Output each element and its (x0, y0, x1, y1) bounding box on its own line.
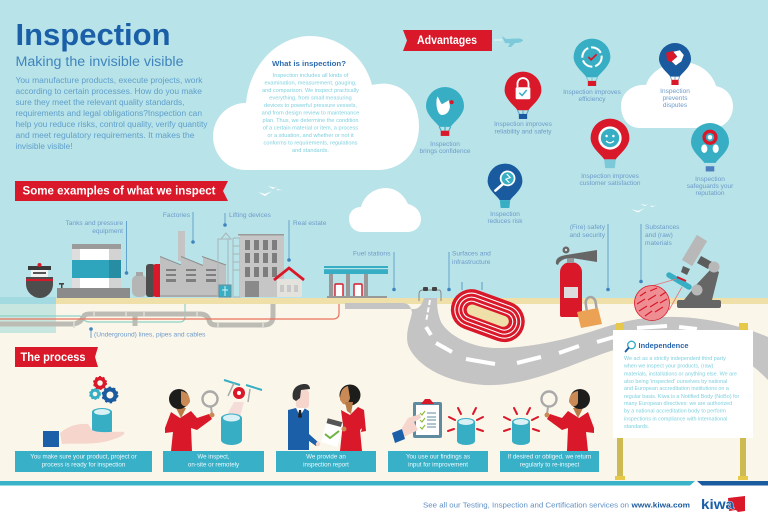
cloud text: Inspection includes all kinds of (273, 73, 349, 79)
step 5 illustration (504, 389, 594, 451)
intro text: invisible visible! (16, 141, 72, 151)
pipes and lines (0, 304, 339, 328)
balloon: reliability: Inspection improves (494, 121, 553, 128)
independence text (623, 356, 740, 430)
independence text: when we inspect your products, (raw) (623, 364, 713, 370)
caption: step 3: inspection report (303, 462, 349, 468)
footer band (0, 481, 768, 486)
label: surfaces: infrastructure (452, 259, 491, 266)
label: fire safety: (Fire) safety (570, 224, 606, 231)
balloon: disputes: prevents (663, 95, 688, 102)
cloud text: examination, measurement, gauging, (264, 80, 357, 86)
subtitle: Making the invisible visible (16, 54, 184, 69)
label: factories: Factories (163, 212, 191, 219)
hand (402, 414, 421, 437)
label: tanks (65, 220, 128, 275)
road markings (426, 300, 697, 364)
kiwa logo (701, 496, 745, 512)
label: underground (89, 327, 206, 338)
microscope (634, 238, 721, 320)
woman in red (340, 384, 366, 451)
caption: step 2 (163, 451, 264, 472)
man in suit (288, 384, 320, 450)
clipboard (413, 399, 442, 438)
footer text: www.kiwa.com (630, 500, 690, 510)
label: lifting devices: Lifting devices (229, 212, 271, 219)
report paper (321, 418, 344, 447)
tank (57, 244, 130, 298)
cloud text: or a situation, and whether or not it (267, 133, 354, 139)
independence text: many European directives: we are authorized (624, 401, 732, 407)
running track (445, 283, 531, 348)
intro text: according to certain processes. How do you make (16, 86, 202, 96)
step 3 illustration (288, 384, 366, 451)
gas bottles (132, 264, 163, 297)
cloud text: and comparison. We inspect practically (262, 88, 359, 94)
woman with magnifier (542, 389, 594, 451)
caption: step 4: input for improvement (408, 462, 468, 468)
balloon: efficiency: efficiency (579, 96, 606, 103)
cuff (392, 429, 405, 443)
white footer background (0, 485, 768, 524)
water (0, 297, 56, 333)
kiwa logo: kiwa (701, 496, 734, 512)
cloud text: conforms to requirements, regulations (264, 140, 358, 146)
label: tanks: Tanks and pressure (65, 220, 123, 227)
label: substances: Substances (645, 224, 680, 231)
balloon: risk: reduces risk (487, 218, 523, 225)
container (221, 414, 242, 445)
gears (90, 377, 118, 402)
cloud text: everything, from small measuring (269, 96, 352, 102)
fuel station (324, 266, 388, 298)
cloud: behind disputes balloon (621, 62, 733, 128)
caption: step 4: You use our findings as (406, 454, 470, 460)
cloud text (262, 73, 359, 154)
lifting device (218, 233, 240, 297)
cloud: middle (349, 188, 421, 232)
red rays (448, 408, 483, 431)
caption: step 1 (15, 451, 152, 472)
label: underground: (Underground) lines, pipes and cables (94, 332, 206, 338)
cloud text: and from design review to maintenance (262, 110, 359, 116)
label: fuel stations: Fuel stations (353, 250, 391, 258)
fire extinguisher (556, 246, 597, 317)
woman with magnifier (165, 389, 218, 451)
padlock (577, 296, 602, 328)
ribbon: advantages (403, 30, 492, 51)
cloud text: plan. Thus, we determine the condition (263, 118, 358, 124)
caption: step 1: process is ready for inspection (42, 462, 126, 468)
label: fire safety: and security (569, 232, 606, 239)
cloud heading: What is inspection? (272, 61, 346, 68)
independence text: inspections in compliance with international (624, 416, 727, 422)
sign post caps (615, 323, 748, 480)
independence text: regular basis. Kiwa is a Notified Body (NoBo) for (624, 394, 740, 400)
balloon: efficiency (563, 39, 622, 103)
balloon: confidence: Inspection (430, 141, 460, 148)
ribbon: some examples (15, 181, 228, 201)
sign posts (617, 438, 746, 478)
balloon: efficiency: Inspection improves (563, 89, 622, 96)
ribbon: some examples: Some examples of what we inspect (22, 186, 216, 198)
independence heading: Independence (638, 341, 688, 350)
fence at road start (419, 287, 441, 301)
balloon: disputes (659, 43, 691, 109)
label: lifting devices (223, 212, 271, 227)
road (345, 298, 768, 385)
label: tanks: equipment (92, 228, 123, 235)
independence signboard (613, 323, 753, 480)
label: substances (639, 224, 680, 283)
cloud text: devices to powerful pressure vessels, (264, 103, 357, 109)
footer text: See all our Testing, Inspection and Certification services on (423, 502, 629, 510)
icon: airplane (494, 36, 523, 47)
building (238, 234, 284, 297)
caption: step 2: on-site or remotely (188, 462, 240, 468)
label: fuel stations (353, 250, 396, 291)
independence text: by a national accreditation body to perform (624, 408, 726, 414)
balloon: risk: Inspection (490, 211, 520, 218)
label: surfaces: Surfaces and (452, 250, 491, 258)
intro text: requirements and legal obligations?Inspection can (16, 108, 202, 118)
intro text (16, 75, 208, 151)
step 4 illustration (392, 399, 483, 445)
ribbon: the process (15, 347, 98, 367)
label: factories (163, 212, 195, 244)
independence text: materials, installations or anything else. We are (624, 372, 737, 378)
balloon: reliability: reliability and safety (494, 128, 552, 136)
caption: step 5 (500, 451, 599, 472)
birds right (631, 204, 656, 212)
cloud text: and standards. (292, 148, 329, 154)
independence text: standards. (624, 424, 649, 430)
balloon: confidence (420, 87, 471, 155)
balloon: risk (487, 164, 523, 225)
footer text (423, 500, 690, 510)
intro text: and meet regulatory requirements. It makes the (16, 130, 195, 140)
caption: step 3 (276, 451, 376, 472)
balloon: reputation (687, 123, 734, 197)
label: real estate (287, 220, 327, 262)
label: fire safety (569, 224, 610, 291)
balloon: customer satisfaction: customer satisfaction (579, 180, 641, 187)
sign board (613, 330, 753, 438)
intro text: sure they meet the relevant quality standards, (16, 97, 184, 107)
label: substances: materials (645, 240, 672, 247)
balloon: confidence: brings confidence (420, 148, 471, 155)
balloon: reputation: Inspection (695, 176, 725, 183)
ground strip (56, 298, 768, 304)
ribbon: advantages: Advantages (417, 35, 477, 47)
house (274, 268, 304, 297)
caption: step 5: regularly to re-inspect (520, 462, 580, 468)
intro text: You manufacture products, execute projects, work (16, 75, 203, 85)
ground background (0, 298, 768, 481)
label: surfaces (447, 250, 491, 291)
ribbon: the process: The process (20, 352, 86, 364)
container top (458, 419, 474, 425)
independence text: We act as a strictly independent third party (624, 356, 726, 362)
step 1 illustration (43, 377, 124, 447)
birds left (258, 186, 282, 196)
independence text: also being 'inspected' ourselves by national (624, 379, 727, 385)
cloud: what is inspection (213, 36, 419, 170)
balloon: customer satisfaction: Inspection improves (581, 173, 640, 180)
cloud text: of a certain material or item, a process (263, 126, 358, 132)
icon: magnifier (626, 341, 635, 352)
title: Inspection (16, 17, 170, 52)
drone (222, 380, 262, 424)
container (457, 418, 475, 445)
balloon: customer satisfaction (579, 119, 641, 187)
caption: step 3: We provide an (306, 454, 346, 460)
step 2 illustration (165, 380, 262, 451)
balloon: reliability (494, 72, 553, 136)
factory (160, 231, 230, 297)
caption: step 2: We inspect, (197, 454, 230, 460)
goal posts (462, 282, 482, 290)
intro text: help you reduce risks, control quality, verify quantity (16, 119, 208, 129)
balloon: disputes: Inspection (660, 88, 690, 95)
independence text: and European accreditation institutions on a (624, 386, 729, 392)
balloon: reputation: reputation (696, 190, 725, 197)
balloon: disputes: disputes (663, 102, 688, 109)
ship (26, 263, 53, 298)
sky background (0, 0, 768, 298)
caption: step 4 (388, 451, 488, 472)
caption: step 1: You make sure your product, project or (30, 454, 137, 460)
balloon: reputation: safeguards your (687, 183, 734, 190)
label: real estate: Real estate (293, 220, 327, 227)
caption: step 5: If desired or obliged, we return (508, 454, 592, 460)
label: substances: and (raw) (645, 232, 673, 239)
